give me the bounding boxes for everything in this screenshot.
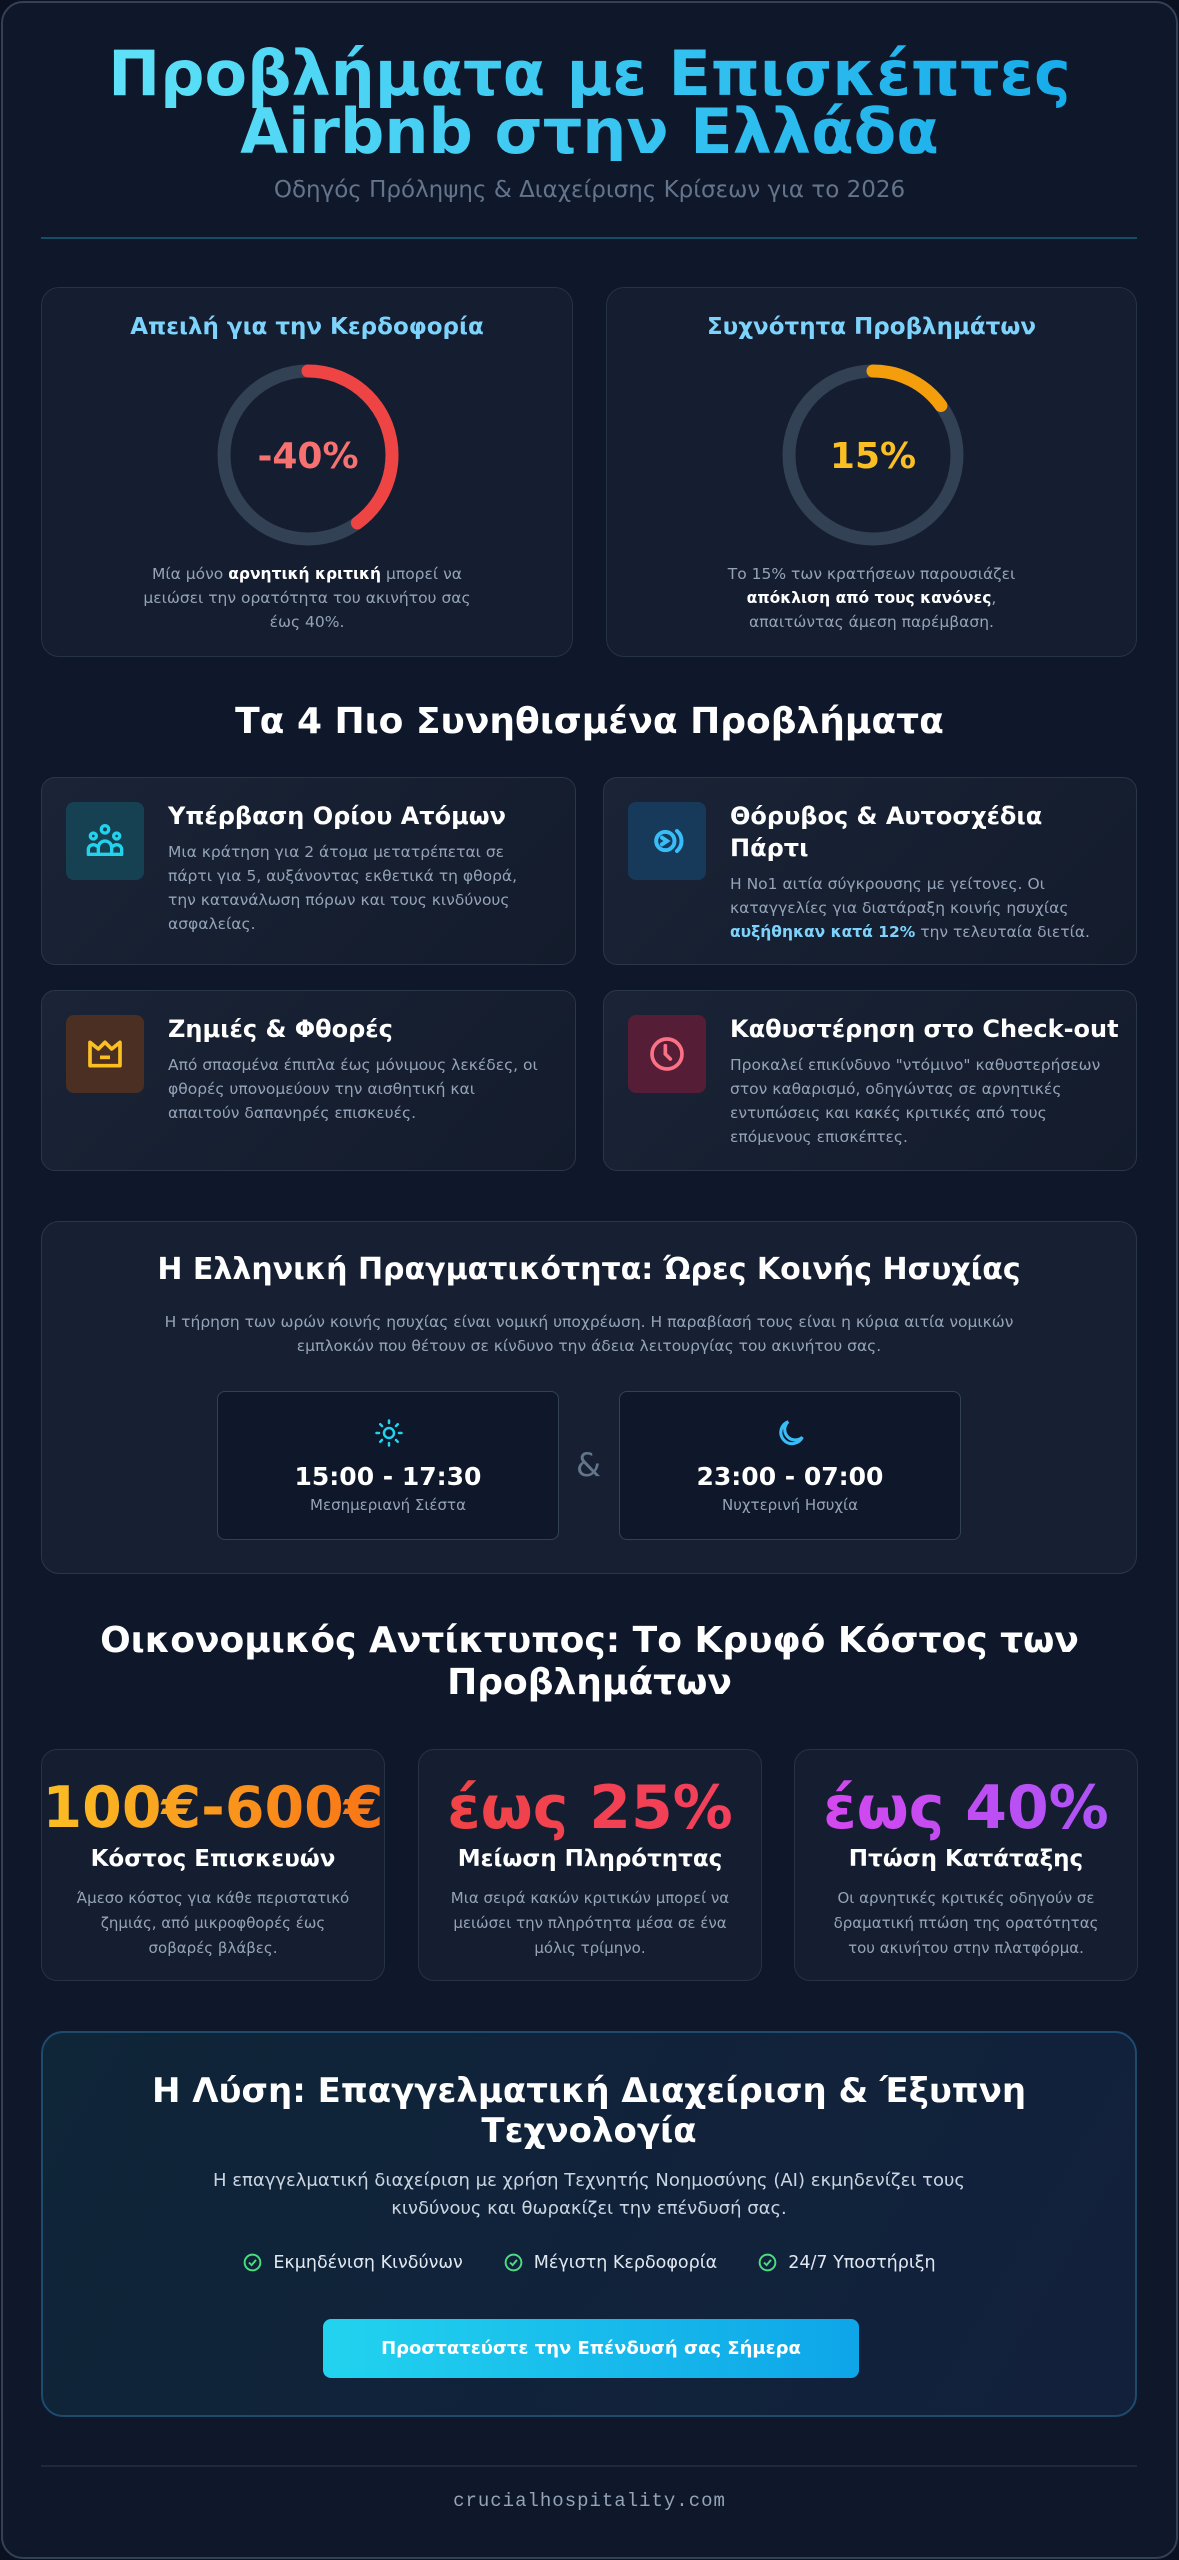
checklist [244,2252,936,2272]
stat card: repair cost: Κόστος Επισκευών [91,1846,335,1872]
stat card: ranking drop: έως 40% [823,1773,1109,1843]
time box: siesta: Μεσημεριανή Σιέστα [310,1496,466,1514]
stat card: repair cost [41,1749,385,1981]
title [0,45,1179,161]
title: Υπέρβαση Ορίου Ατόμων [168,802,506,830]
title: Ζημιές & Φθορές [168,1015,393,1043]
stat card: ranking drop: Πτώση Κατάταξης [849,1846,1083,1872]
description: Η επαγγελματική διαχείριση με χρήση Τεχνητής Νοημοσύνης (AI) εκμηδενίζει τους κινδύνους και θωρακίζει την επένδυσή σας. [213,2170,965,2219]
stat card: occupancy drop: έως 25% [447,1773,733,1843]
title: Καθυστέρηση στο Check-out [730,1015,1119,1043]
heading: economic impact: Προβλημάτων [447,1662,732,1703]
card title: Συχνότητα Προβλημάτων [707,314,1036,340]
button: Προστατεύστε την Επένδυσή σας Σήμερα [381,2338,801,2359]
heading: economic impact: Οικονομικός Αντίκτυπος: Το Κρυφό Κόστος των [100,1620,1079,1661]
stat card: occupancy drop [418,1749,762,1981]
description: Το 15% των κρατήσεων παρουσιάζει απόκλιση από τους κανόνες, απαιτώντας άμεση παρέμβαση. [728,565,1015,631]
stat card: repair cost: 100€-600€ [43,1775,383,1841]
heading: economic impact [100,1620,1079,1703]
time box: night: 23:00 - 07:00 [697,1462,883,1491]
icon: sound [628,802,706,880]
text: Προκαλεί επικίνδυνο "ντόμινο" καθυστερήσεων στον καθαρισμό, οδηγώντας σε αρνητικές εντυπώσεις και κακές κριτικές από τους επόμενους επισκέπτες. [730,1056,1100,1146]
ring chart: 15% [782,364,964,546]
icon: moon [779,1420,804,1446]
icon: box [66,1015,144,1093]
panel: damages [41,990,576,1171]
heading: Η Ελληνική Πραγματικότητα: Ώρες Κοινής Ησυχίας [157,1252,1021,1287]
subtitle: Οδηγός Πρόληψης & Διαχείρισης Κρίσεων για το 2026 [274,177,905,203]
panel: frequency [606,287,1137,657]
card title: Απειλή για την Κερδοφορία [130,314,484,340]
title: Airbnb στην Ελλάδα [240,95,939,168]
ampersand: & [576,1446,601,1484]
panel: profitability threat [41,287,573,657]
heading: top 4 problems: Τα 4 Πιο Συνηθισμένα Προβλήματα [235,701,944,742]
text: Από σπασμένα έπιπλα έως μόνιμους λεκέδες, οι φθορές υπονομεύουν την αισθητική και απαιτούν δαπανηρές επισκευές. [168,1056,538,1122]
panel: solution [41,2031,1137,2417]
description: Μία μόνο αρνητική κριτική μπορεί να μειώσει την ορατότητα του ακινήτου σας έως 40%. [143,565,471,631]
ring chart: 15%: 15% [830,436,916,477]
icon: sun [375,1419,403,1447]
panel: occupancy [41,777,576,965]
stat card: occupancy drop: Μια σειρά κακών κριτικών μπορεί να μειώσει την πληρότητα μέσα σε ένα μόλις τρίμηνο. [451,1889,729,1957]
heading: Τεχνολογία [481,2111,697,2151]
checklist: Μέγιστη Κερδοφορία [534,2252,717,2272]
text: Η Νο1 αιτία σύγκρουσης με γείτονες. Οι καταγγελίες για διατάραξη κοινής ησυχίας αυξήθηκαν κατά 12% την τελευταία διετία. [730,875,1090,941]
time box: night: Νυχτερινή Ησυχία [722,1496,858,1514]
time box: night [619,1391,961,1540]
checklist: 24/7 Υποστήριξη [788,2252,936,2272]
heading: Η Λύση: Επαγγελματική Διαχείριση & Έξυπνη [152,2071,1026,2111]
title: Θόρυβος & Αυτοσχέδια Πάρτι [730,802,1042,862]
stat card: repair cost: Άμεσο κόστος για κάθε περιστατικό ζημιάς, από μικροφθορές έως σοβαρές βλάβες. [77,1889,349,1957]
footer: crucialhospitality.com [453,2490,726,2512]
heading [152,2071,1026,2151]
panel: late checkout [603,990,1137,1171]
stat card: ranking drop: Οι αρνητικές κριτικές οδηγούν σε δραματική πτώση της ορατότητας του ακινήτου στην πλατφόρμα. [834,1889,1098,1957]
text: Μια κράτηση για 2 άτομα μετατρέπεται σε πάρτι για 5, αυξάνοντας εκθετικά τη φθορά, την κατανάλωση πόρων και τους κινδύνους ασφαλείας. [168,843,517,933]
ring chart: -40%: -40% [257,436,359,477]
button [323,2319,859,2378]
ring chart: -40% [218,364,398,546]
panel: quiet hours [41,1221,1137,1574]
icon: clock [628,1015,706,1093]
stat card: ranking drop [794,1749,1138,1981]
title: Προβλήματα με Επισκέπτες [108,37,1071,110]
stat card: occupancy drop: Μείωση Πληρότητας [458,1846,722,1872]
time box: siesta: 15:00 - 17:30 [295,1462,481,1491]
panel: noise [603,777,1137,965]
icon: people [66,802,144,880]
time box: siesta [217,1391,559,1540]
checklist: Εκμηδένιση Κινδύνων [273,2252,463,2272]
description: Η τήρηση των ωρών κοινής ησυχίας είναι νομική υποχρέωση. Η παραβίασή τους είναι η κύρια αιτία νομικών εμπλοκών που θέτουν σε κίνδυνο την άδεια λειτουργίας του ακινήτου σας. [165,1313,1013,1355]
